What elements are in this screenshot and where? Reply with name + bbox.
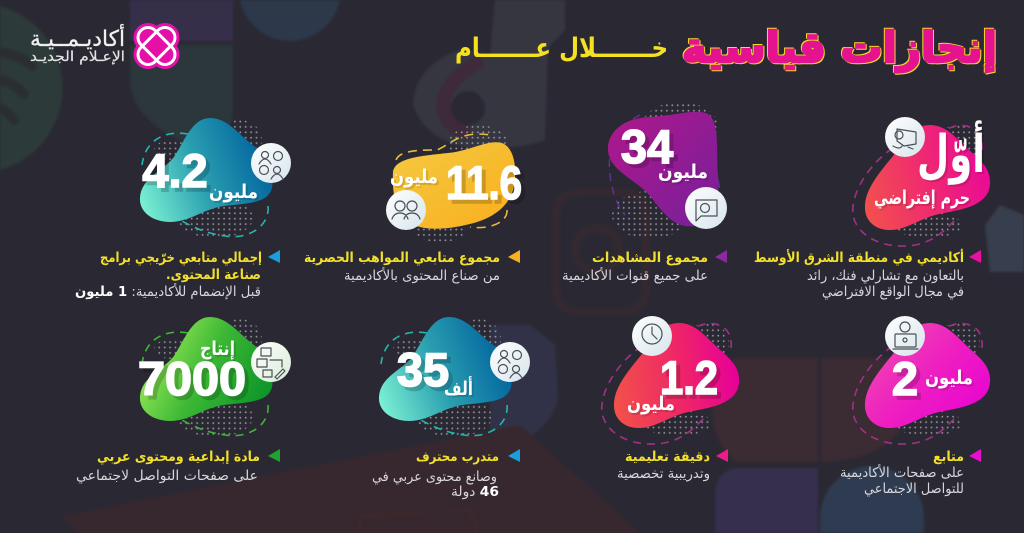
text block: 4.2 million: إجمالي متابعي خرّيجي برامج: [100, 250, 262, 266]
background logo: figma top: [130, 0, 340, 146]
panel: 2 million followers: 2: [892, 352, 918, 405]
panel: 1.2 million minutes: مليون: [627, 393, 675, 415]
background logo: figma bottom: [520, 358, 924, 533]
text block: 35 thousand trainees: [372, 449, 520, 500]
heading: subtitle: خـــــــلال عـــــــام: [455, 33, 668, 64]
panel: first virtual campus: أوّل: [917, 120, 985, 185]
text block: 2 million followers: متابع: [933, 449, 964, 465]
icon: vr headset: [885, 117, 925, 157]
text block: 11.6 million: مجموع متابعي المواهب الحصرية: [304, 250, 500, 266]
text block: 1.2 million minutes: دقيقة تعليمية: [625, 449, 710, 465]
text block: 4.2 million: [75, 250, 280, 300]
panel: 4.2 million: 4.2: [142, 144, 208, 197]
panel: 7000 productions: 7000: [138, 352, 246, 405]
text block: 1.2 million minutes: [617, 449, 728, 482]
text block: 35 thousand trainees: متدرب محترف: [416, 449, 499, 465]
text block: 11.6 million: من صناع المحتوى بالأكاديمية: [344, 267, 500, 284]
logo text: أكاديـمــيـة: [30, 24, 125, 52]
panel: 4.2 million: [140, 118, 291, 238]
text block: 4.2 million: قبل الإنضمام للأكاديمية: 1 مليون: [75, 283, 261, 300]
background logo: tiktok: [413, 0, 565, 148]
icon: two people: [386, 190, 426, 230]
icon: clock: [632, 316, 672, 356]
panel: 35 thousand trainees: [379, 317, 530, 437]
panel: first virtual campus: [853, 117, 990, 246]
background logo: spotify: [0, 6, 63, 170]
icon: logo mark: [134, 23, 179, 69]
panel: 7000 productions: إنتاج: [200, 338, 235, 360]
panel: 11.6 million: 11.6: [446, 156, 522, 209]
logo text: [30, 24, 125, 65]
text block: 7000 productions: على صفحات التواصل لاجتماعي: [76, 468, 258, 484]
text block: 34 million views: مجموع المشاهدات: [592, 250, 708, 266]
text block: 7000 productions: مادة إبداعية ومحتوى عربي: [97, 449, 260, 465]
text block: 1.2 million minutes: وتدريبية تخصصية: [617, 466, 710, 482]
text block: first virtual campus: بالتعاون مع تشارلي فنك، رائد: [807, 268, 964, 284]
panel: 34 million views: 34: [621, 120, 673, 173]
panel: 1.2 million minutes: [602, 316, 739, 444]
text block: 2 million followers: [840, 449, 981, 497]
text block: first virtual campus: أكاديمي في منطقة الشرق الأوسط: [754, 249, 964, 266]
panel: 2 million followers: مليون: [925, 367, 973, 389]
logo text: الإعـلام الجديـد: [30, 49, 125, 65]
panel: 11.6 million: مليون: [390, 166, 438, 188]
panel: 2 million followers: [853, 316, 990, 444]
panel: 34 million views: [608, 102, 727, 239]
panel: 1.2 million minutes: 1.2: [660, 351, 718, 404]
panel: 4.2 million: مليون: [209, 181, 258, 203]
text block: 11.6 million: [304, 250, 520, 284]
text block: 7000 productions: [76, 449, 280, 484]
logo: [30, 23, 179, 69]
panel: 11.6 million: [386, 125, 522, 242]
text block: 34 million views: [562, 250, 727, 284]
text block: first virtual campus: في مجال الواقع الافتراضي: [822, 284, 964, 300]
icon: video comment: [685, 187, 727, 229]
panel: 35 thousand trainees: 35: [397, 343, 449, 396]
text block: 35 thousand trainees: 46 دولة: [451, 484, 499, 500]
icon: laptop user: [885, 316, 925, 356]
panel: first virtual campus: حرم إفتراضي: [874, 187, 970, 209]
icon: media content: [251, 342, 291, 382]
text block: 34 million views: على جميع قنوات الأكاديمية: [562, 267, 708, 284]
icon: conversation: [490, 342, 530, 382]
text block: 4.2 million: صناعة المحتوى.: [166, 267, 261, 283]
text block: first virtual campus: [754, 249, 981, 300]
heading: main title: إنجازات قياسية: [682, 23, 997, 73]
panel: 7000 productions: [138, 317, 291, 437]
background logo: youtube: [62, 425, 640, 533]
background logo: twitter shapes: [490, 205, 1024, 450]
panel: 35 thousand trainees: ألف: [444, 376, 473, 400]
text block: 2 million followers: للتواصل الاجتماعي: [864, 481, 964, 497]
panel: 34 million views: مليون: [658, 161, 708, 183]
text block: 2 million followers: على صفحات الأكاديمية: [840, 464, 964, 481]
background logo: instagram: [556, 192, 646, 312]
title: [455, 23, 997, 73]
text block: 35 thousand trainees: وصانع محتوى عربي في: [372, 469, 497, 485]
icon: conversation: [251, 143, 291, 183]
